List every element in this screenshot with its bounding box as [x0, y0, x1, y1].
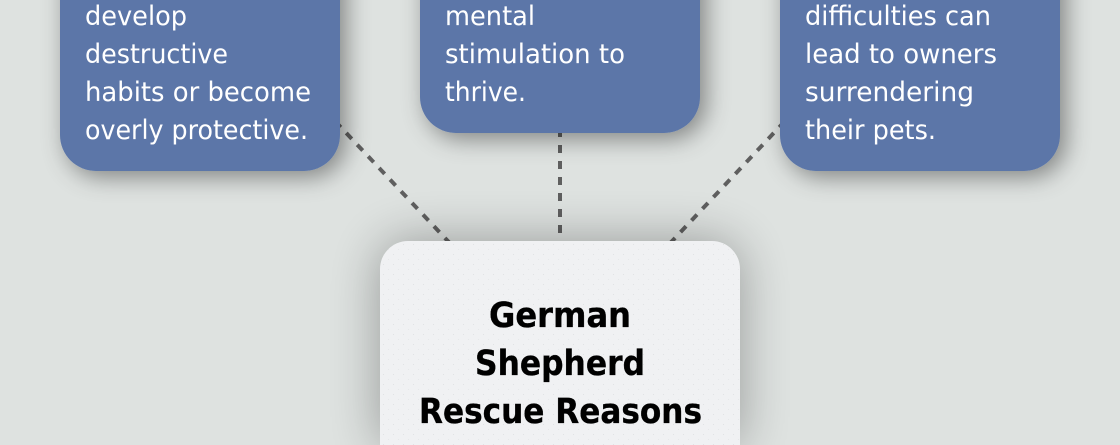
left card text	[85, 1, 311, 146]
right card text: lead to owners	[805, 39, 997, 70]
title: German	[489, 296, 631, 336]
connector: middle card to center	[558, 129, 562, 241]
left card text: destructive	[85, 39, 228, 70]
left card text: overly protective.	[85, 115, 308, 146]
left card text: develop	[85, 1, 187, 32]
middle card text: stimulation to	[445, 39, 625, 70]
connector: right card to center	[669, 121, 785, 244]
title: Shepherd	[475, 344, 645, 384]
panel: middle card	[420, 0, 700, 133]
panel: left card	[60, 0, 340, 171]
panel: center title card	[380, 241, 740, 445]
connector: left card to center	[335, 121, 451, 244]
panel: right card	[780, 0, 1060, 171]
left card text: habits or become	[85, 77, 311, 108]
right card text: difficulties can	[805, 1, 991, 32]
title	[419, 296, 702, 432]
title: Rescue Reasons	[419, 392, 702, 432]
middle card text: thrive.	[445, 77, 526, 108]
middle card text: mental	[445, 1, 535, 32]
middle card text	[445, 1, 625, 108]
right card text	[805, 1, 997, 146]
right card text: their pets.	[805, 115, 936, 146]
right card text: surrendering	[805, 77, 974, 108]
